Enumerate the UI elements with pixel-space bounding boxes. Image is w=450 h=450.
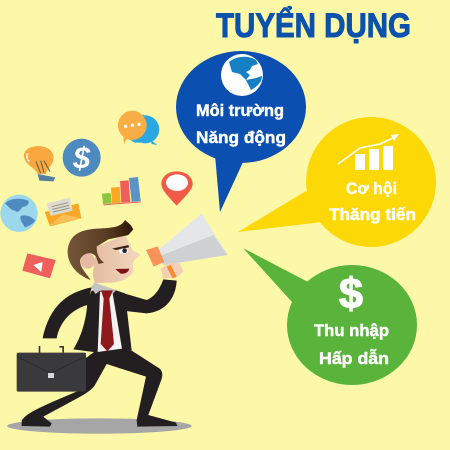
label: Thu nhập: Thu nhập: [314, 322, 389, 340]
arm holding briefcase: [43, 287, 92, 338]
tie: [101, 290, 114, 351]
icon: globe: [0, 195, 38, 232]
briefcase: [17, 346, 86, 392]
floating icons: [0, 111, 193, 232]
eye and brow: [112, 245, 129, 254]
label: Môi trường: Môi trường: [196, 102, 284, 120]
icon: dollar coin: [63, 139, 101, 177]
label: Hấp dẫn: Hấp dẫn: [319, 349, 389, 368]
label: Thăng tiến: Thăng tiến: [329, 206, 416, 224]
legs: [22, 350, 177, 427]
icon: dollar sign: $: [339, 270, 363, 318]
speech bubble: Cơ hội Thăng tiến: [238, 117, 436, 247]
speech bubble: Thu nhập Hấp dẫn: [243, 248, 417, 385]
businessman with megaphone: [7, 213, 228, 434]
label: Cơ hội: Cơ hội: [346, 180, 397, 198]
megaphone: [146, 213, 228, 267]
title: TUYỂN DỤNG: [216, 7, 411, 45]
icon: envelope: [45, 198, 81, 226]
icon: location pin: [161, 171, 193, 206]
icon: white globe: [221, 54, 263, 96]
jacket: [73, 290, 132, 352]
icon: dollar coin: $: [72, 142, 91, 176]
icon: bar chart: [102, 177, 141, 205]
neck and face: [93, 235, 141, 283]
mouth: [115, 269, 129, 274]
shirt: [98, 292, 122, 352]
icon: chat bubbles: [118, 111, 159, 145]
collar: [91, 283, 116, 294]
speech bubble: Môi trường Năng động: [176, 51, 306, 212]
raised arm: [115, 279, 177, 313]
icon: red video card: [22, 253, 56, 278]
ground shadow: [7, 418, 192, 434]
icon: light bulb: [24, 146, 55, 181]
hair: [68, 220, 133, 280]
icon: growth chart: [338, 134, 399, 170]
label: Năng động: Năng động: [196, 129, 286, 147]
hand and handle: [161, 263, 183, 278]
ear: [80, 253, 95, 269]
